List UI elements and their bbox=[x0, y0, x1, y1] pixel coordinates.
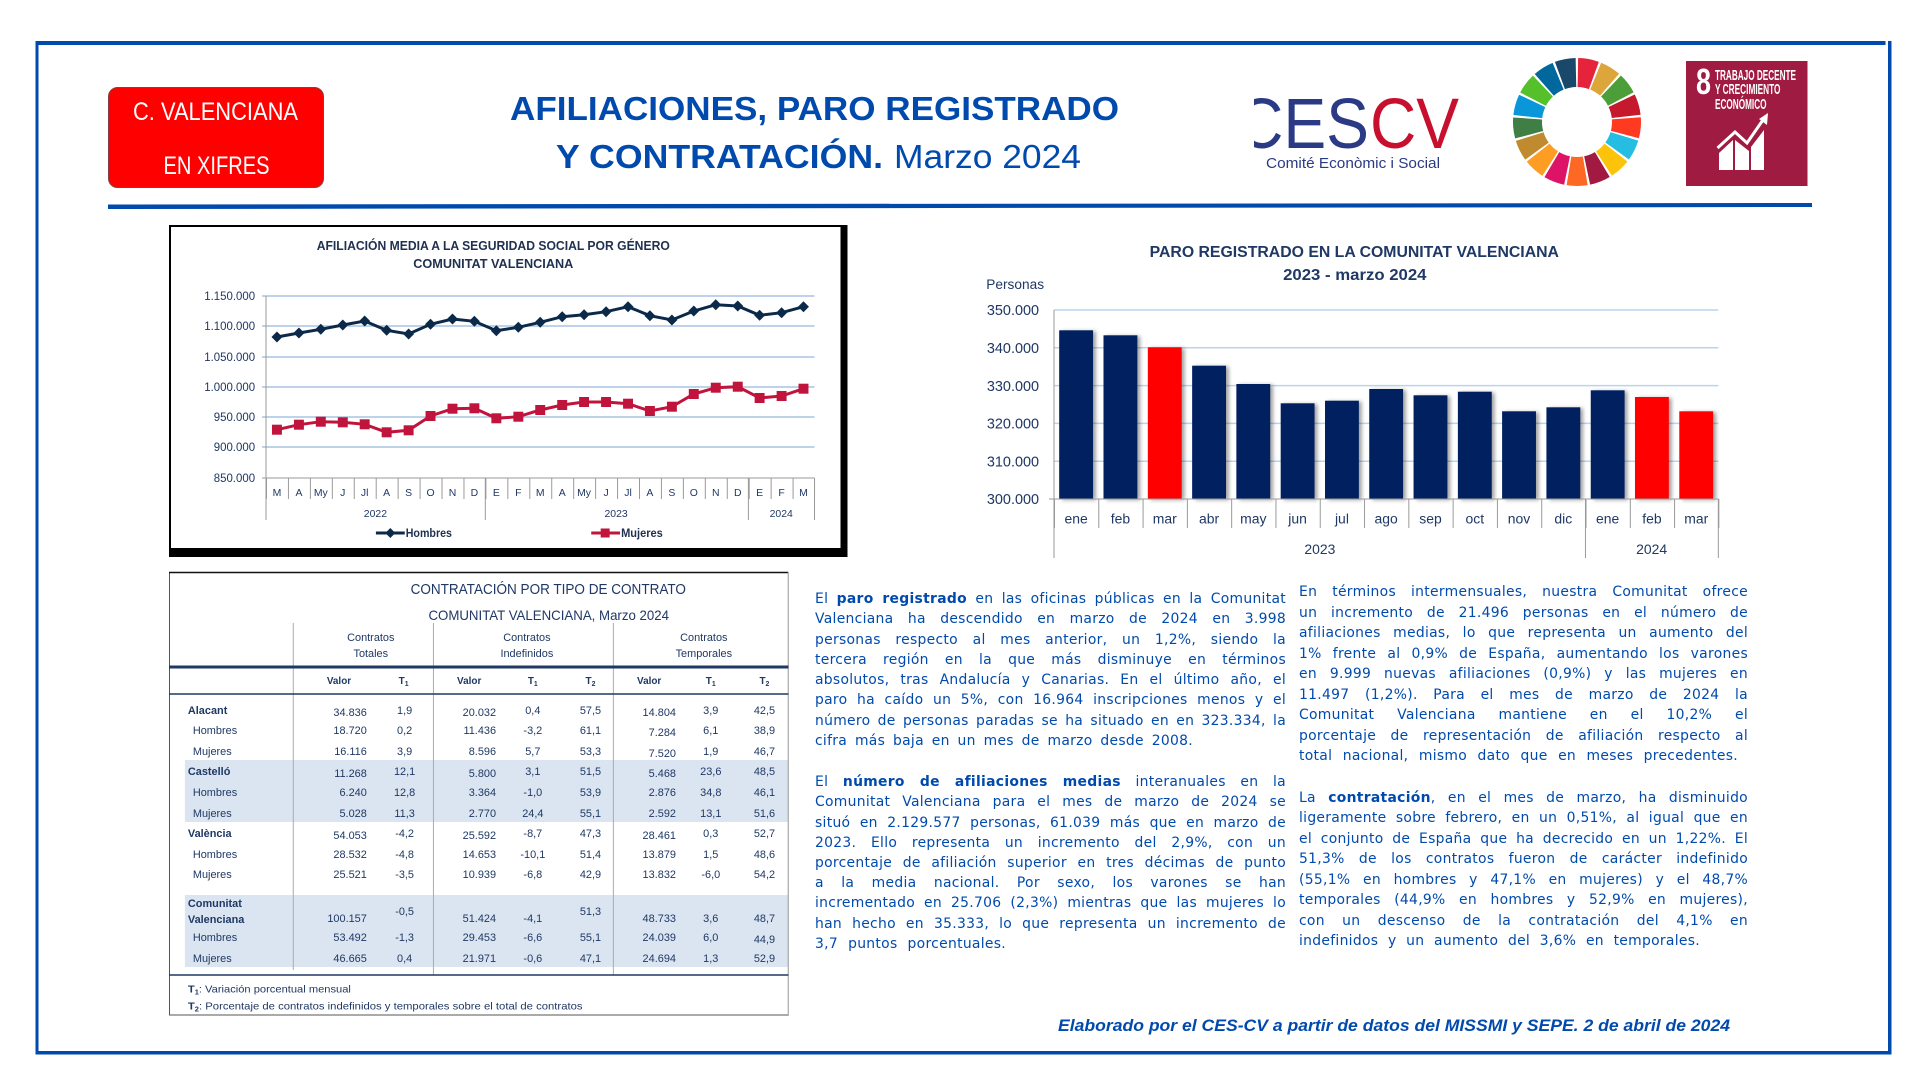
row: Comunitat Valenciana: 100.157 bbox=[327, 913, 367, 925]
x axis years: paro: 2024 bbox=[1636, 541, 1667, 557]
table column headers: 1 bbox=[405, 681, 409, 688]
x axis years: afiliación: 2022 bbox=[364, 509, 387, 520]
y axis labels: paro: 300.000 bbox=[987, 492, 1039, 508]
x axis months: paro: may bbox=[1240, 510, 1266, 527]
row: Castelló Mujeres: 5.028 bbox=[339, 808, 367, 820]
row: Alacant Mujeres: 53,3 bbox=[580, 746, 601, 758]
row: Alacant Hombres: 7.284 bbox=[649, 727, 676, 739]
row: Comunitat Valenciana Mujeres: 47,1 bbox=[580, 953, 601, 965]
x axis months: afiliación: F bbox=[515, 488, 522, 499]
row: Alacant Hombres: 38,9 bbox=[754, 725, 775, 737]
x axis months: paro: mar bbox=[1153, 510, 1177, 527]
text block: términos intermensuales: 11.497 (1,2%). Para el mes de marzo de 2024 la bbox=[1299, 686, 1748, 702]
row: Alacant Mujeres bbox=[193, 746, 775, 760]
x axis months: afiliación: M bbox=[273, 488, 281, 499]
text block: términos intermensuales: afiliaciones medias, lo que representa un aumento del bbox=[1299, 624, 1748, 640]
x axis months: paro: sep bbox=[1419, 510, 1442, 527]
row: Castelló Hombres bbox=[193, 787, 775, 799]
panel: contratación table bbox=[169, 572, 788, 1015]
x axis months: paro: abr bbox=[1199, 510, 1219, 527]
text block: contratación: temporales (44,9% en hombres y 52,9% en mujeres), bbox=[1299, 892, 1748, 908]
text block: afiliaciones medias: porcentaje de afiliación superior en tres décimas de punto bbox=[815, 855, 1286, 871]
x axis months: afiliación: J bbox=[340, 488, 345, 499]
table column headers: T bbox=[586, 676, 592, 687]
x axis months: afiliación: Jl bbox=[361, 488, 368, 499]
y axis labels: paro: 330.000 bbox=[987, 379, 1039, 395]
row: Castelló Mujeres: 13,1 bbox=[700, 808, 721, 820]
text block: contratación: con un descenso de la contratación del 4,1% en bbox=[1299, 912, 1748, 928]
text block: paro registrado: El paro registrado en las oficinas públicas en la Comunitat bbox=[815, 591, 1286, 607]
x axis months: afiliación: A bbox=[295, 488, 302, 499]
x axis months: paro: ene bbox=[1596, 510, 1620, 527]
row: Castelló Mujeres: Mujeres bbox=[193, 808, 232, 820]
table bands bbox=[185, 760, 788, 967]
chart title: paro bbox=[1150, 244, 1559, 284]
logo: CES CV bbox=[1254, 98, 1459, 168]
row: Castelló Hombres: 2.876 bbox=[649, 787, 676, 799]
x axis months: afiliación: S bbox=[405, 488, 412, 499]
table column headers: 2 bbox=[592, 681, 596, 688]
x axis months: afiliación: M bbox=[799, 488, 808, 499]
row: Castelló Mujeres: 2.592 bbox=[649, 808, 676, 820]
row: València Mujeres: Mujeres bbox=[193, 869, 232, 881]
row: Castelló Hombres: 46,1 bbox=[754, 787, 775, 799]
panel: paro registrado bar chart bbox=[986, 244, 1719, 558]
y axis labels: afiliación: 1.100.000 bbox=[204, 321, 255, 333]
text block: afiliaciones medias: 3,7 puntos porcentuales. bbox=[815, 936, 1006, 952]
row: Alacant Mujeres: 16.116 bbox=[334, 746, 367, 758]
row: Castelló: 11.268 bbox=[334, 768, 367, 780]
text block: términos intermensuales: 1% frente al 0,9% de España, aumentando los varones bbox=[1299, 646, 1748, 662]
row: Alacant Mujeres: 8.596 bbox=[469, 746, 496, 758]
x axis months: paro: jul bbox=[1334, 510, 1349, 527]
x axis months: afiliación: N bbox=[449, 488, 456, 499]
icon: SDG 8 decent work and economic growth: TRABAJO DECENTE bbox=[1715, 68, 1796, 84]
row: Alacant Mujeres: 7.520 bbox=[649, 748, 676, 760]
y axis labels: paro: 350.000 bbox=[987, 303, 1039, 319]
row: Castelló: 5.800 bbox=[469, 768, 496, 780]
text block: contratación: (55,1% en hombres y 47,1% en mujeres) y el 48,7% bbox=[1299, 872, 1748, 888]
table group headers: Totales bbox=[353, 648, 389, 660]
row: Alacant Mujeres: Mujeres bbox=[193, 746, 232, 758]
row: Alacant Mujeres: 46,7 bbox=[754, 746, 775, 758]
source note: Elaborado por el CES-CV a partir de datos del MISSMI y SEPE. 2 de abril de 2024 bbox=[1058, 1016, 1731, 1035]
text block: paro registrado: absolutos, tras Andalucía y Canarias. En el último año, el bbox=[815, 672, 1286, 688]
row: Comunitat Valenciana Hombres: Hombres bbox=[193, 932, 238, 944]
x axis months: afiliación: S bbox=[668, 488, 675, 499]
bars: paro bbox=[1059, 330, 1713, 499]
row: Castelló Mujeres: 24,4 bbox=[522, 808, 543, 820]
x axis months: afiliación: O bbox=[690, 488, 698, 499]
text block: afiliaciones medias: Comunitat Valenciana para el mes de marzo de 2024 se bbox=[815, 794, 1286, 810]
row: València Hombres: 48,6 bbox=[754, 849, 775, 861]
table title: COMUNITAT VALENCIANA, Marzo 2024 bbox=[428, 607, 669, 623]
x axis months: afiliación: A bbox=[383, 488, 390, 499]
row: València: 47,3 bbox=[580, 828, 601, 840]
row: Castelló: 12,1 bbox=[394, 766, 415, 778]
text block: contratación bbox=[1299, 790, 1748, 948]
table group headers: Contratos bbox=[680, 632, 728, 644]
row: Comunitat Valenciana Mujeres: 21.971 bbox=[463, 953, 496, 965]
row: Comunitat Valenciana Hombres: 53.492 bbox=[333, 932, 367, 944]
row: Comunitat Valenciana Mujeres: 1,3 bbox=[703, 953, 718, 965]
x axis months: paro: ene bbox=[1064, 510, 1088, 527]
x axis months: afiliación: A bbox=[559, 488, 566, 499]
y axis labels: paro: 310.000 bbox=[987, 454, 1039, 471]
row: València: 54.053 bbox=[333, 830, 367, 842]
legend: afiliación: Mujeres bbox=[621, 528, 663, 540]
text block: paro registrado: número de personas paradas se ha situado en en 323.334, la bbox=[815, 713, 1286, 729]
text block: contratación: el conjunto de España que ha decrecido en un 1,22%. El bbox=[1299, 830, 1748, 846]
logo: CES CV: CES bbox=[1237, 85, 1369, 164]
row: València Hombres: Hombres bbox=[193, 849, 238, 861]
row: Alacant Hombres: 0,2 bbox=[397, 725, 412, 737]
x axis months: afiliación: E bbox=[756, 488, 763, 499]
chart title: afiliación: AFILIACIÓN MEDIA A LA SEGURIDAD SOCIAL POR GÉNERO bbox=[317, 238, 670, 253]
row: Castelló: 5.468 bbox=[649, 768, 676, 780]
row: Alacant: 20.032 bbox=[463, 707, 496, 719]
row: Comunitat Valenciana Mujeres: 24.694 bbox=[643, 953, 676, 965]
text block: afiliaciones medias bbox=[815, 774, 1286, 952]
panel: afiliación line chart bbox=[169, 225, 848, 557]
row: Alacant Hombres: -3,2 bbox=[523, 725, 542, 737]
y axis labels: afiliación: 850.000 bbox=[214, 473, 255, 485]
row: Comunitat Valenciana Mujeres: -0,6 bbox=[523, 953, 542, 965]
table notes bbox=[188, 984, 583, 1014]
row: Comunitat Valenciana Hombres: 29.453 bbox=[463, 932, 496, 944]
table column headers: 1 bbox=[712, 681, 716, 688]
row: Castelló Hombres: 53,9 bbox=[580, 787, 601, 799]
x axis months: paro: oct bbox=[1466, 510, 1484, 527]
x axis months: afiliación: My bbox=[577, 488, 592, 499]
text block: afiliaciones medias: situó en 2.129.577 personas, 61.039 más que en marzo de bbox=[815, 815, 1286, 831]
row: Castelló: Castelló bbox=[188, 766, 231, 778]
text block: paro registrado: cifra más baja en un mes de marzo desde 2008. bbox=[815, 733, 1193, 749]
chart title: paro: PARO REGISTRADO EN LA COMUNITAT VALENCIANA bbox=[1150, 244, 1559, 261]
header divider bbox=[108, 203, 1812, 209]
x axis months: afiliación: J bbox=[603, 488, 609, 499]
x axis months: afiliación: My bbox=[314, 488, 329, 499]
chart title: paro: 2023 - marzo 2024 bbox=[1283, 267, 1427, 284]
text block: contratación: indefinidos y un aumento del 3,6% en temporales. bbox=[1299, 932, 1700, 948]
table column headers: T bbox=[528, 676, 534, 687]
text block: paro registrado: Valenciana ha descendido en marzo de 2024 en 3.998 bbox=[815, 611, 1286, 627]
row: Castelló bbox=[188, 766, 775, 780]
text block: términos intermensuales bbox=[1299, 584, 1748, 764]
row: València Mujeres: -6,0 bbox=[701, 869, 720, 881]
row: Alacant Mujeres: 1,9 bbox=[703, 746, 718, 758]
row: Alacant Hombres: 18.720 bbox=[333, 725, 367, 737]
table notes: : Variación porcentual mensual bbox=[199, 984, 351, 996]
row: València Hombres: 1,5 bbox=[703, 849, 718, 861]
text block: afiliaciones medias: El número de afiliaciones medias interanuales en la bbox=[815, 774, 1286, 790]
row: Alacant Hombres: Hombres bbox=[193, 725, 238, 737]
row: Castelló: 3,1 bbox=[525, 766, 540, 778]
title: Marzo 2024 bbox=[894, 138, 1081, 175]
table group headers: Temporales bbox=[676, 648, 733, 660]
text block: términos intermensuales: porcentaje de representación de afiliación respecto al bbox=[1299, 728, 1748, 744]
row: València Mujeres: 54,2 bbox=[754, 869, 775, 881]
row: València: -4,2 bbox=[395, 828, 414, 840]
row: Alacant Hombres bbox=[193, 725, 775, 739]
icon: SDG 8 decent work and economic growth bbox=[1686, 61, 1808, 186]
series: Hombres bbox=[277, 305, 803, 337]
chart title: afiliación bbox=[317, 238, 670, 271]
row: Comunitat Valenciana bbox=[188, 898, 775, 926]
row: Comunitat Valenciana Mujeres: 0,4 bbox=[397, 953, 412, 965]
row: Comunitat Valenciana Hombres: 24.039 bbox=[643, 932, 676, 944]
text block: términos intermensuales: en 9.999 nuevas afiliaciones (0,9%) y las mujeres en bbox=[1299, 666, 1748, 682]
row: Alacant: 14.804 bbox=[643, 707, 676, 719]
row: Comunitat Valenciana Hombres: 44,9 bbox=[754, 934, 775, 946]
row: València Mujeres bbox=[193, 869, 775, 881]
row: Comunitat Valenciana Hombres: -6,6 bbox=[523, 932, 542, 944]
badge: C. Valenciana en xifres: EN XIFRES bbox=[164, 152, 270, 180]
text block: paro registrado bbox=[815, 591, 1286, 749]
text block: afiliaciones medias: incrementado en 25.706 (2,3%) mientras que las mujeres lo bbox=[815, 895, 1286, 911]
row: València: València bbox=[188, 828, 233, 840]
x axis months: afiliación bbox=[273, 488, 808, 499]
row: Alacant Hombres: 6,1 bbox=[703, 725, 718, 737]
text block: términos intermensuales: En términos intermensuales, nuestra Comunitat ofrece bbox=[1299, 584, 1748, 600]
x axis months: paro: feb bbox=[1111, 510, 1130, 527]
x axis years: paro: 2023 bbox=[1304, 541, 1336, 557]
table notes: 1 bbox=[195, 989, 199, 997]
row: València: 52,7 bbox=[754, 828, 775, 840]
row: Alacant Hombres: 61,1 bbox=[580, 725, 601, 737]
text block: contratación: La contratación, en el mes de marzo, ha disminuido bbox=[1299, 790, 1748, 806]
row: València Hombres: -4,8 bbox=[395, 849, 414, 861]
row: Castelló Mujeres: 51,6 bbox=[754, 808, 775, 820]
text block: contratación: ligeramente sobre febrero, en un 0,51%, al igual que en bbox=[1299, 810, 1748, 826]
row: València Hombres: 13.879 bbox=[643, 849, 676, 861]
title bbox=[510, 90, 1119, 175]
row: Alacant Hombres: 11.436 bbox=[463, 725, 496, 737]
row: València bbox=[188, 828, 775, 842]
row: Castelló Mujeres: 2.770 bbox=[469, 808, 496, 820]
legend: afiliación: Hombres bbox=[406, 528, 452, 540]
icon: SDG 8 decent work and economic growth: Y CRECIMIENTO bbox=[1715, 82, 1780, 98]
logo: CES CV: Comité Econòmic i Social bbox=[1266, 155, 1440, 172]
row: Comunitat Valenciana Mujeres: Mujeres bbox=[193, 953, 232, 965]
row: Comunitat Valenciana: 3,6 bbox=[703, 913, 718, 925]
row: València Mujeres: 10.939 bbox=[463, 869, 496, 881]
legend: afiliación bbox=[376, 528, 663, 540]
row: Castelló: 48,5 bbox=[754, 766, 775, 778]
x axis months: afiliación: D bbox=[734, 488, 742, 499]
text block: contratación: 51,3% de los contratos fueron de carácter indefinido bbox=[1299, 850, 1748, 866]
y axis labels: afiliación: 900.000 bbox=[214, 442, 255, 454]
y axis labels: afiliación: 1.150.000 bbox=[204, 291, 255, 303]
x axis months: afiliación: E bbox=[493, 488, 500, 499]
row: Comunitat Valenciana: 51.424 bbox=[463, 913, 496, 925]
row: Comunitat Valenciana Hombres bbox=[193, 932, 775, 946]
table notes: 2 bbox=[195, 1006, 199, 1014]
x axis months: paro: mar bbox=[1684, 510, 1709, 527]
logo: CES CV: CV bbox=[1370, 85, 1460, 164]
x axis months: afiliación: F bbox=[778, 488, 785, 499]
x axis months: paro: ago bbox=[1375, 510, 1398, 527]
row: Comunitat Valenciana Hombres: 55,1 bbox=[580, 932, 601, 944]
row: Castelló Hombres: 34,8 bbox=[700, 787, 721, 799]
row: Alacant: 1,9 bbox=[397, 705, 412, 717]
y axis labels: paro: 340.000 bbox=[987, 341, 1039, 357]
row: València: -8,7 bbox=[523, 828, 542, 840]
icon: SDG colour wheel bbox=[1507, 52, 1647, 192]
icon: SDG 8 decent work and economic growth: ECONÓMICO bbox=[1715, 95, 1766, 113]
y axis labels: paro bbox=[987, 303, 1039, 508]
table column headers bbox=[327, 676, 770, 688]
y axis labels: paro: 320.000 bbox=[987, 416, 1039, 433]
row: Comunitat Valenciana Mujeres: 46.665 bbox=[333, 953, 367, 965]
table group headers bbox=[347, 632, 733, 660]
x axis years: afiliación: 2024 bbox=[770, 509, 793, 520]
title: Y CONTRATACIÓN. bbox=[556, 138, 883, 175]
row: València Mujeres: -3,5 bbox=[395, 869, 414, 881]
row: Castelló: 51,5 bbox=[580, 766, 601, 778]
row: València Hombres: 51,4 bbox=[580, 849, 601, 861]
row: València Mujeres: -6,8 bbox=[523, 869, 542, 881]
table notes: T bbox=[188, 1001, 195, 1013]
text block: paro registrado: tercera región en la que más disminuye en términos bbox=[815, 652, 1286, 668]
row: València Mujeres: 25.521 bbox=[333, 869, 367, 881]
table column headers: Valor bbox=[327, 676, 351, 687]
text block: términos intermensuales: total nacional, mismo dato que en meses precedentes. bbox=[1299, 748, 1738, 764]
badge: C. Valenciana en xifres bbox=[108, 88, 324, 188]
table column headers: T bbox=[706, 676, 712, 687]
y axis labels: afiliación: 1.050.000 bbox=[204, 352, 255, 364]
badge: C. Valenciana en xifres: C. VALENCIANA bbox=[133, 98, 298, 126]
y axis labels: afiliación: 950.000 bbox=[214, 412, 255, 424]
row: Alacant Mujeres: 5,7 bbox=[525, 746, 540, 758]
table column headers: T bbox=[399, 676, 405, 687]
text block: afiliaciones medias: a la media nacional. Por sexo, los varones se han bbox=[815, 875, 1286, 891]
row: València: 25.592 bbox=[463, 830, 496, 842]
table title bbox=[411, 581, 686, 623]
text block: afiliaciones medias: han hecho en 35.333, lo que representa un incremento de bbox=[815, 916, 1286, 932]
row: Comunitat Valenciana: 48,7 bbox=[754, 913, 775, 925]
x axis years: afiliación bbox=[364, 509, 793, 520]
row: Comunitat Valenciana: -4,1 bbox=[523, 913, 542, 925]
table column headers: T bbox=[759, 676, 766, 687]
row: Castelló Hombres: 12,8 bbox=[394, 787, 415, 799]
row: Comunitat Valenciana Mujeres bbox=[193, 953, 775, 965]
row: Castelló Hombres: Hombres bbox=[193, 787, 238, 799]
x axis months: paro: jun bbox=[1287, 510, 1307, 527]
row: Comunitat Valenciana: Valenciana bbox=[188, 914, 245, 926]
table group headers: Contratos bbox=[503, 632, 551, 644]
row: Castelló Mujeres bbox=[193, 808, 775, 820]
row: Castelló Mujeres: 11,3 bbox=[394, 808, 415, 820]
row: Comunitat Valenciana: Comunitat bbox=[188, 898, 242, 910]
row: València Hombres: 14.653 bbox=[463, 849, 496, 861]
table column headers: 2 bbox=[766, 681, 770, 688]
x axis months: paro: feb bbox=[1642, 510, 1662, 527]
table column headers: 1 bbox=[534, 681, 538, 688]
row: Comunitat Valenciana: 48.733 bbox=[643, 913, 676, 925]
series: Mujeres bbox=[277, 387, 803, 432]
row: València Hombres: 28.532 bbox=[333, 849, 367, 861]
x axis years: afiliación: 2023 bbox=[604, 509, 628, 520]
x axis years: paro bbox=[1304, 541, 1667, 557]
text block: términos intermensuales: un incremento de 21.496 personas en el número de bbox=[1299, 604, 1748, 620]
row: Alacant: 34.836 bbox=[333, 707, 367, 719]
row: Comunitat Valenciana: -0,5 bbox=[395, 906, 414, 918]
row: València: 28.461 bbox=[643, 830, 676, 842]
row: València Mujeres: 42,9 bbox=[580, 869, 601, 881]
row: Alacant: 57,5 bbox=[580, 705, 601, 717]
row: Comunitat Valenciana: 51,3 bbox=[580, 906, 601, 918]
text block: términos intermensuales: Comunitat Valenciana mantiene en el 10,2% el bbox=[1299, 706, 1748, 722]
y axis labels: afiliación: 1.000.000 bbox=[204, 382, 255, 394]
row: Alacant: Alacant bbox=[188, 705, 228, 717]
table notes: : Porcentaje de contratos indefinidos y temporales sobre el total de contratos bbox=[199, 1001, 583, 1013]
table notes: T bbox=[188, 984, 195, 996]
text block: paro registrado: paro ha caído un 5%, con 16.964 inscripciones menos y el bbox=[815, 692, 1286, 708]
x axis months: afiliación: N bbox=[712, 488, 720, 499]
row: València Hombres bbox=[193, 849, 775, 861]
row: Comunitat Valenciana Hombres: 6,0 bbox=[703, 932, 718, 944]
row: Alacant bbox=[188, 705, 775, 719]
icon: SDG 8 decent work and economic growth: 8 bbox=[1696, 61, 1711, 102]
x axis months: paro: nov bbox=[1508, 510, 1530, 527]
row: València Mujeres: 13.832 bbox=[643, 869, 676, 881]
row: València: 0,3 bbox=[703, 828, 718, 840]
table title: CONTRATACIÓN POR TIPO DE CONTRATO bbox=[411, 581, 686, 598]
row: Castelló Hombres: 3.364 bbox=[469, 787, 496, 799]
table group headers: Indefinidos bbox=[500, 648, 554, 660]
table group headers: Contratos bbox=[347, 632, 395, 644]
row: Comunitat Valenciana Hombres: -1,3 bbox=[395, 932, 414, 944]
row: Alacant Mujeres: 3,9 bbox=[397, 746, 412, 758]
text block: paro registrado: personas respecto al mes anterior, un 1,2%, siendo la bbox=[815, 632, 1286, 648]
row: Castelló: 23,6 bbox=[700, 766, 721, 778]
row: València Hombres: -10,1 bbox=[520, 849, 545, 861]
x axis months: afiliación: D bbox=[471, 488, 479, 499]
row: Comunitat Valenciana Mujeres: 52,9 bbox=[754, 953, 775, 965]
row: Alacant: 0,4 bbox=[525, 705, 540, 717]
row: Alacant: 42,5 bbox=[754, 705, 775, 717]
row: Castelló Hombres: 6.240 bbox=[339, 787, 367, 799]
text block: afiliaciones medias: 2023. Ello representa un incremento del 2,9%, con un bbox=[815, 835, 1286, 851]
row: Castelló Hombres: -1,0 bbox=[523, 787, 542, 799]
table column headers: Valor bbox=[457, 676, 481, 687]
row: Alacant: 3,9 bbox=[703, 705, 718, 717]
chart title: afiliación: COMUNITAT VALENCIANA bbox=[413, 257, 573, 271]
x axis months: afiliación: M bbox=[536, 488, 545, 499]
table column headers: Valor bbox=[637, 676, 661, 687]
y axis labels: afiliación bbox=[204, 291, 255, 485]
x axis months: afiliación: O bbox=[426, 488, 435, 499]
title: AFILIACIONES, PARO REGISTRADO bbox=[510, 90, 1119, 127]
x axis months: afiliación: A bbox=[646, 488, 653, 499]
row: Castelló Mujeres: 55,1 bbox=[580, 808, 601, 820]
y axis unit: Personas bbox=[986, 276, 1044, 292]
x axis months: paro: dic bbox=[1554, 510, 1572, 527]
x axis months: paro bbox=[1064, 510, 1709, 527]
x axis months: afiliación: Jl bbox=[624, 488, 632, 499]
